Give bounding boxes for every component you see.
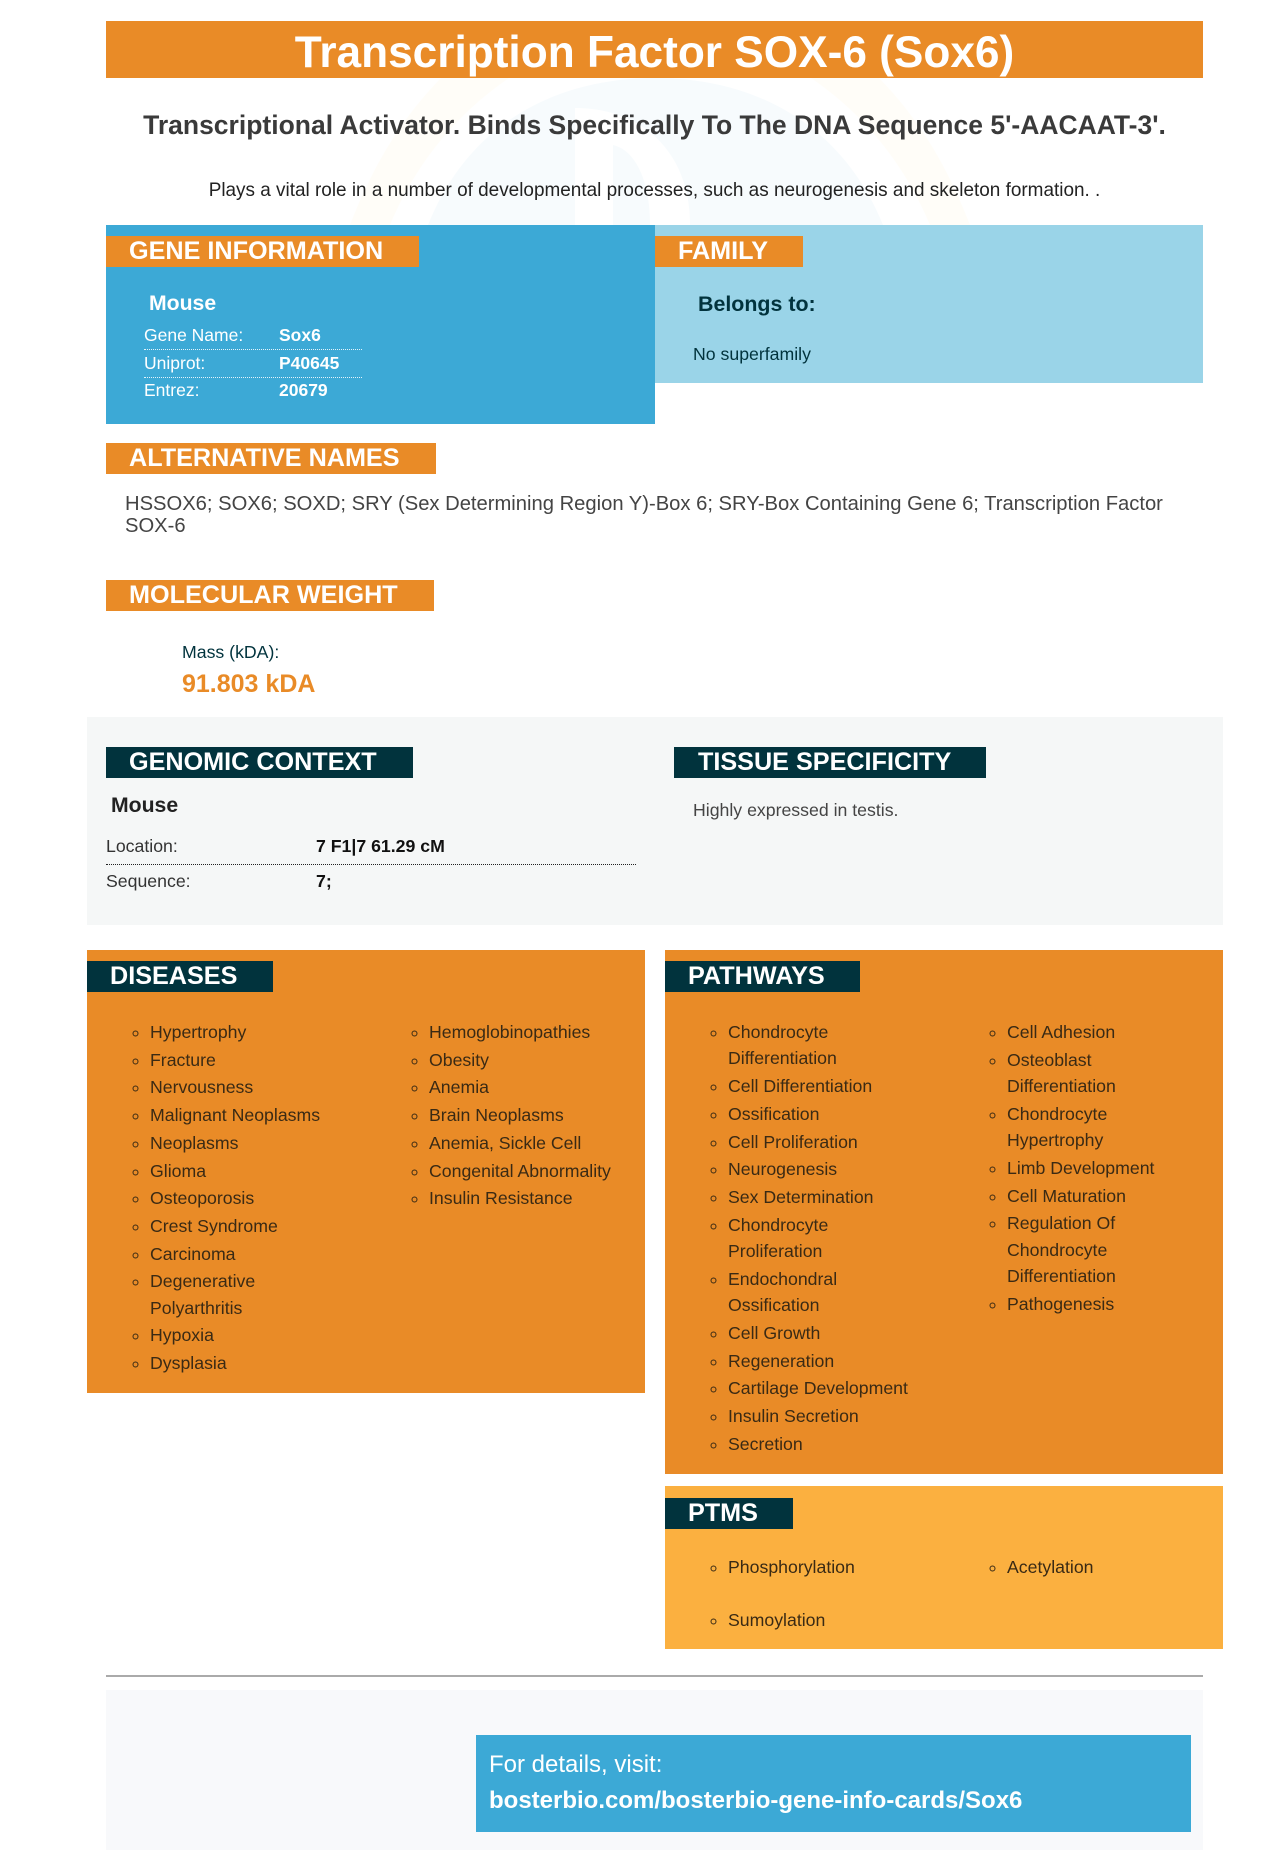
alternative names text: HSSOX6; SOX6; SOXD; SRY (Sex Determining Region Y)-Box 6; SRY-Box Containing Gene 6; Transcription Factor <box>125 493 1163 515</box>
list: pathways column 1: Proliferation <box>728 1241 822 1261</box>
list: pathways column 1: Regeneration <box>728 1351 834 1371</box>
panel: genomic context and tissue specificity <box>87 717 1223 925</box>
heading: genomic context: GENOMIC CONTEXT <box>129 748 377 776</box>
sequence row: Sequence: <box>106 871 191 891</box>
list: pathways column 2: Chondrocyte <box>1007 1104 1107 1124</box>
heading: pathways <box>665 961 860 992</box>
watermark logo <box>340 70 980 226</box>
list: diseases column 1: Degenerative <box>150 1271 255 1291</box>
family value: No superfamily <box>693 344 811 364</box>
list: pathways column 1: Cell Differentiation <box>728 1076 872 1096</box>
location row: Location: <box>106 836 178 856</box>
subtitle: Transcriptional Activator. Binds Specifically To The DNA Sequence 5'-AACAAT-3'. <box>143 110 1166 140</box>
list: pathways column 1 <box>710 1022 908 1454</box>
mass value: 91.803 kDA <box>182 670 315 698</box>
list: pathways column 1: Differentiation <box>728 1048 837 1068</box>
alternative names text <box>125 493 1163 536</box>
list: pathways column 1: Neurogenesis <box>728 1159 837 1179</box>
heading: molecular weight: MOLECULAR WEIGHT <box>129 581 398 609</box>
list: diseases column 1: Crest Syndrome <box>150 1216 278 1236</box>
panel: pathways <box>665 950 1223 1474</box>
title banner: Transcription Factor SOX-6 (Sox6) <box>295 28 1014 77</box>
entrez row: Entrez: <box>144 380 199 400</box>
list: diseases column 1: Osteoporosis <box>150 1188 254 1208</box>
list: diseases column 1: Malignant Neoplasms <box>150 1105 320 1125</box>
heading: alternative names: ALTERNATIVE NAMES <box>129 444 400 472</box>
callout label: For details, visit: <box>489 1751 662 1778</box>
alternative names text: SOX-6 <box>125 514 186 536</box>
list: diseases column 1: Hypertrophy <box>150 1022 246 1042</box>
panel: ptms <box>665 1486 1223 1649</box>
panel: family <box>655 225 1203 383</box>
entrez row: 20679 <box>279 380 328 400</box>
gene name row <box>144 323 362 350</box>
uniprot row <box>144 351 362 378</box>
location row <box>106 834 636 865</box>
list: pathways column 1: Ossification <box>728 1104 819 1124</box>
list: diseases column 2: Congenital Abnormality <box>429 1161 611 1181</box>
list: diseases column 2: Anemia <box>429 1077 489 1097</box>
list: pathways column 1: Cell Growth <box>728 1323 820 1343</box>
heading: ptms: PTMS <box>688 1499 758 1527</box>
location row: 7 F1|7 61.29 cM <box>316 836 445 856</box>
list: pathways column 2: Limb Development <box>1007 1158 1154 1178</box>
uniprot row: Uniprot: <box>144 353 205 373</box>
list: pathways column 1: Endochondral <box>728 1269 837 1289</box>
list: diseases column 2: Anemia, Sickle Cell <box>429 1133 581 1153</box>
mass label: Mass (kDA): <box>182 642 279 662</box>
tissue specificity text: Highly expressed in testis. <box>693 800 898 820</box>
list: pathways column 1: Ossification <box>728 1295 819 1315</box>
list: pathways column 1: Sex Determination <box>728 1187 874 1207</box>
list: diseases column 1: Fracture <box>150 1050 216 1070</box>
panel: gene information <box>106 225 655 424</box>
heading: pathways: PATHWAYS <box>688 962 825 990</box>
list: pathways column 2: Cell Maturation <box>1007 1186 1126 1206</box>
list: pathways column 2: Differentiation <box>1007 1076 1116 1096</box>
callout: details link <box>476 1735 1191 1832</box>
sequence row <box>106 871 332 891</box>
heading: family: FAMILY <box>678 237 768 265</box>
gene name row: Gene Name: <box>144 325 243 345</box>
list: diseases column 2: Brain Neoplasms <box>429 1105 564 1125</box>
list: ptms column 1 <box>710 1557 855 1630</box>
list: pathways column 2: Hypertrophy <box>1007 1130 1103 1150</box>
list: diseases column 2: Obesity <box>429 1050 489 1070</box>
list: pathways column 2: Regulation Of <box>1007 1213 1115 1233</box>
list: diseases column 1 <box>132 1022 320 1373</box>
gene name row: Sox6 <box>279 325 321 345</box>
list: pathways column 2: Chondrocyte <box>1007 1240 1107 1260</box>
list: ptms column 2: Acetylation <box>1007 1557 1094 1577</box>
list: pathways column 2: Osteoblast <box>1007 1050 1092 1070</box>
sequence row: 7; <box>316 871 332 891</box>
description: Plays a vital role in a number of developmental processes, such as neurogenesis and skeleton formation. . <box>209 180 1100 201</box>
footer divider <box>106 1675 1203 1677</box>
list: diseases column 1: Polyarthritis <box>150 1298 242 1318</box>
heading: family <box>655 236 803 267</box>
list: ptms column 1: Sumoylation <box>728 1610 825 1630</box>
heading: gene information: GENE INFORMATION <box>129 237 383 265</box>
list: pathways column 2: Differentiation <box>1007 1266 1116 1286</box>
list: pathways column 1: Cartilage Development <box>728 1378 908 1398</box>
list: diseases column 2: Insulin Resistance <box>429 1188 573 1208</box>
list: pathways column 2: Cell Adhesion <box>1007 1022 1115 1042</box>
list: diseases column 1: Nervousness <box>150 1077 253 1097</box>
species label: Mouse <box>111 794 178 817</box>
list: diseases column 1: Dysplasia <box>150 1353 227 1373</box>
callout url: bosterbio.com/bosterbio-gene-info-cards/Sox6 <box>489 1787 1022 1814</box>
list: pathways column 1: Insulin Secretion <box>728 1406 859 1426</box>
heading: diseases <box>87 961 273 992</box>
list: pathways column 1: Cell Proliferation <box>728 1132 858 1152</box>
list: diseases column 1: Neoplasms <box>150 1133 238 1153</box>
panel: diseases <box>87 950 645 1393</box>
entrez row <box>144 380 328 400</box>
list: diseases column 2 <box>412 1022 611 1208</box>
list: pathways column 2 <box>990 1022 1154 1314</box>
title banner <box>106 21 1203 78</box>
list: pathways column 1: Secretion <box>728 1434 803 1454</box>
list: diseases column 1: Hypoxia <box>150 1325 214 1345</box>
heading: ptms <box>665 1498 793 1529</box>
list: pathways column 2: Pathogenesis <box>1007 1294 1114 1314</box>
heading: tissue specificity: TISSUE SPECIFICITY <box>698 748 951 776</box>
list: pathways column 1: Chondrocyte <box>728 1215 828 1235</box>
list: diseases column 1: Carcinoma <box>150 1244 236 1264</box>
list: ptms column 1: Phosphorylation <box>728 1557 855 1577</box>
belongs to label: Belongs to: <box>698 292 816 316</box>
species label: Mouse <box>149 292 216 315</box>
list: pathways column 1: Chondrocyte <box>728 1022 828 1042</box>
uniprot row: P40645 <box>279 353 339 373</box>
heading: diseases: DISEASES <box>110 962 237 990</box>
panel: footer <box>106 1690 1203 1850</box>
list: diseases column 2: Hemoglobinopathies <box>429 1022 590 1042</box>
list: diseases column 1: Glioma <box>150 1161 206 1181</box>
